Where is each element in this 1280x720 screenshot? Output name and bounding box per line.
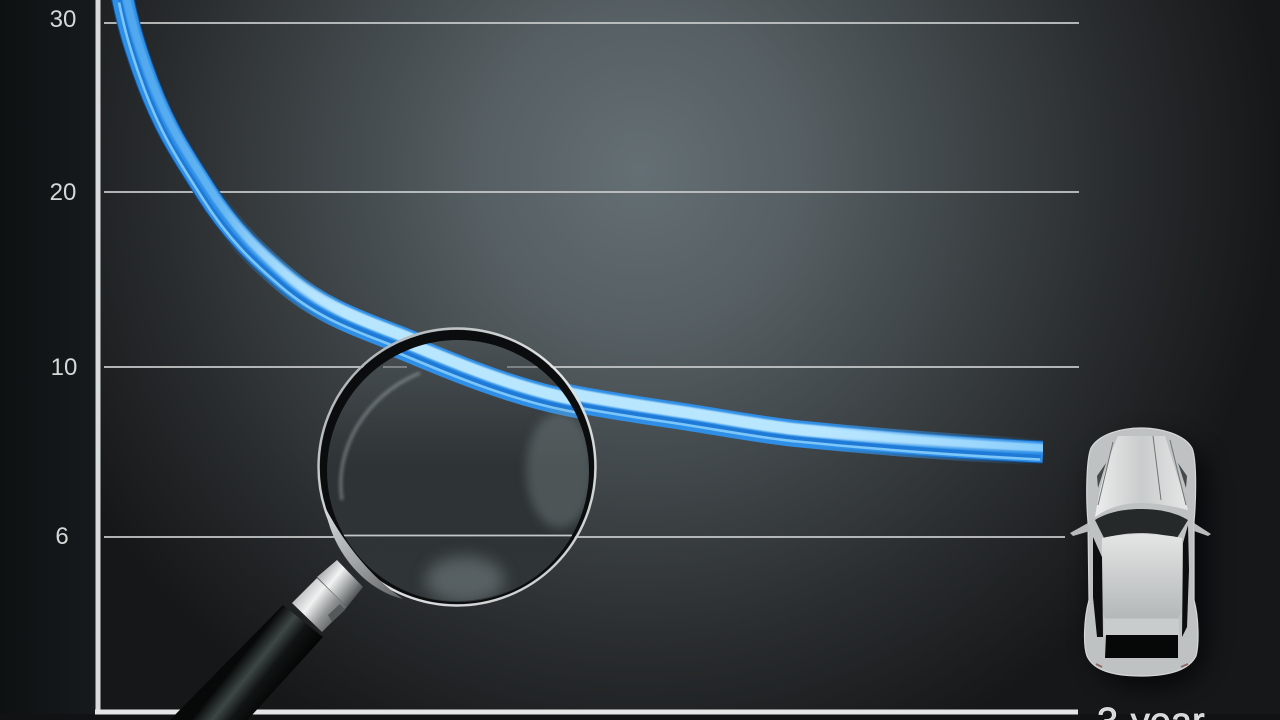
side mirrors xyxy=(1070,523,1211,536)
y axis labels: 30 xyxy=(50,6,76,33)
hood xyxy=(1095,436,1188,517)
car shadow xyxy=(1092,438,1208,688)
tail lights xyxy=(1096,664,1188,667)
metal collar xyxy=(292,560,363,632)
rear panel xyxy=(1104,619,1179,636)
hood creases xyxy=(1098,436,1186,505)
black inner rim xyxy=(320,330,594,604)
blue declining curve xyxy=(119,0,1046,460)
side windows xyxy=(1093,525,1189,637)
y axis xyxy=(96,0,100,712)
faint gridline in lens xyxy=(383,366,540,368)
roof xyxy=(1101,534,1183,618)
gridline in lens xyxy=(342,534,572,536)
headlights xyxy=(1097,463,1187,488)
y axis labels: 6 xyxy=(55,523,69,550)
grid lines xyxy=(104,23,1079,537)
lens glass xyxy=(321,331,593,603)
bottom strip xyxy=(0,714,1280,720)
lens contents xyxy=(338,343,589,601)
car body xyxy=(1085,428,1198,676)
magnified curve xyxy=(394,343,578,418)
magnifying glass xyxy=(170,327,597,720)
silver lower bevel xyxy=(325,507,403,599)
windshield xyxy=(1095,509,1188,538)
rear window xyxy=(1105,635,1178,658)
car top view xyxy=(1070,428,1211,688)
y axis labels: 10 xyxy=(51,354,77,381)
y axis labels xyxy=(50,6,77,550)
chart xyxy=(50,0,1079,712)
y axis labels: 20 xyxy=(50,179,76,206)
lens reflections xyxy=(341,373,594,604)
handle xyxy=(165,605,323,720)
left margin xyxy=(0,0,97,720)
x axis xyxy=(95,710,1078,714)
silver outer rim xyxy=(318,328,596,606)
